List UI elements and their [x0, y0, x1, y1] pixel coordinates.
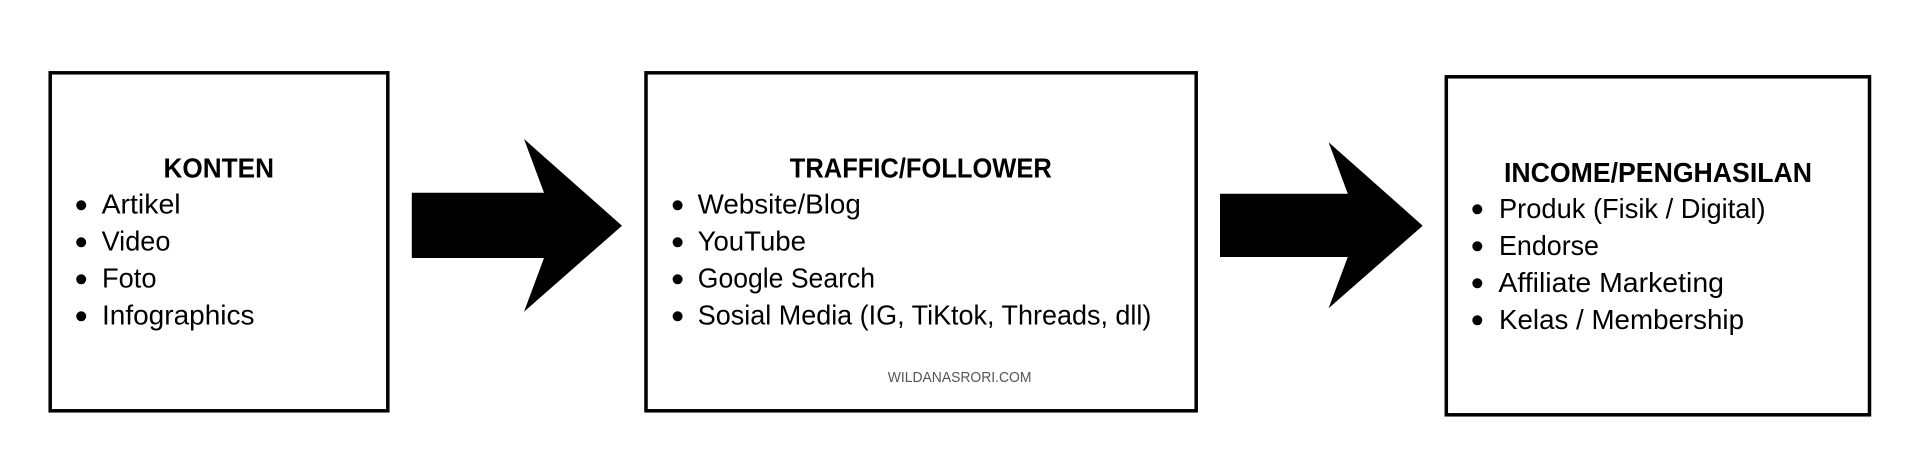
list: konten items: Infographics [102, 300, 254, 331]
list: traffic items: Website/Blog [698, 189, 861, 220]
list: konten items: Video [102, 226, 170, 257]
list: income items: Endorse [1499, 230, 1599, 261]
panel: konten [50, 73, 388, 411]
list: konten items: Foto [102, 263, 156, 294]
arrow: traffic to income [1220, 142, 1423, 308]
list: traffic items: Sosial Media (IG, TiKtok, Threads, dll) [698, 300, 1151, 331]
heading: income/penghasilan: INCOME/PENGHASILAN [1504, 157, 1812, 188]
list: income items: Kelas / Membership [1499, 304, 1744, 335]
list: traffic items: Google Search [698, 263, 875, 294]
list: income items: Affiliate Marketing [1498, 267, 1724, 298]
list: income items: Produk (Fisik / Digital) [1499, 193, 1766, 224]
list: income items [1472, 193, 1766, 335]
list: konten items: Artikel [102, 189, 181, 220]
arrow: konten to traffic [412, 139, 622, 312]
list: traffic items [673, 189, 1151, 331]
list: traffic items: YouTube [698, 226, 806, 257]
watermark: WILDANASRORI.COM [888, 369, 1031, 386]
list: konten items [76, 189, 254, 331]
heading: konten: KONTEN [164, 153, 274, 184]
heading: traffic/follower: TRAFFIC/FOLLOWER [790, 153, 1052, 184]
panel: traffic/follower [646, 73, 1196, 411]
panel: income/penghasilan [1446, 77, 1870, 415]
